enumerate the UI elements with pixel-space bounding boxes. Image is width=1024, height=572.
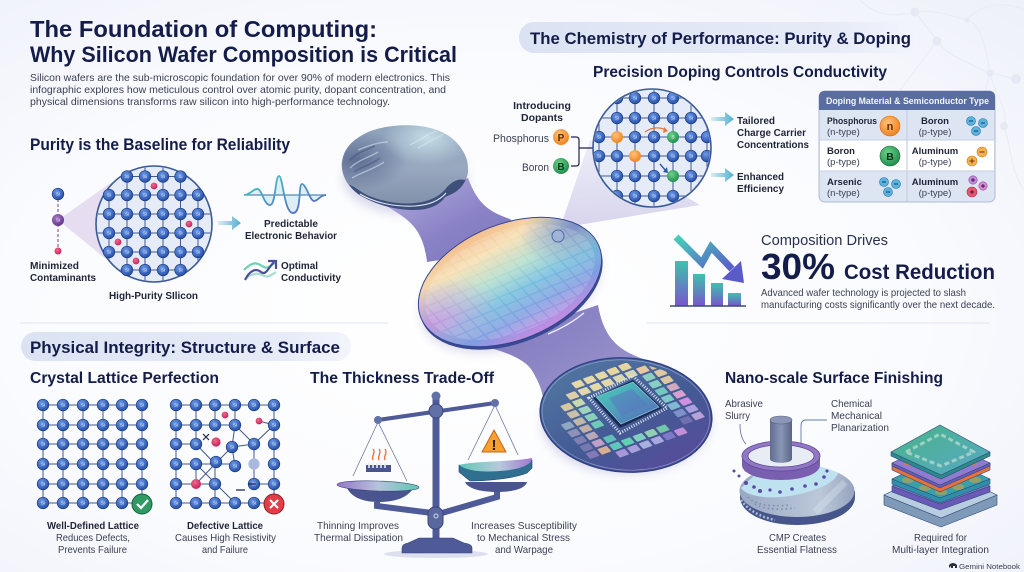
- lattice: well-defined: Si: [61, 462, 65, 467]
- lattice: high-purity silicon: Si: [125, 231, 129, 236]
- lattice: defective: Si: [213, 482, 217, 487]
- label: minimized contaminants: Minimized: [30, 260, 79, 272]
- row 1: (p-type): [919, 127, 951, 138]
- lattice: well-defined: [37, 399, 148, 509]
- label: enhanced efficiency: [737, 171, 784, 195]
- solder bumps: [904, 460, 977, 478]
- purple layer: [892, 463, 990, 510]
- lattice: defective: Si: [194, 501, 198, 506]
- lattice: defective: Si: [272, 442, 276, 447]
- right pan: thick wafer: [459, 458, 532, 492]
- scale beam and post: [377, 397, 497, 545]
- row 1: (n-type): [827, 127, 860, 138]
- heading pill: physical integrity: [21, 332, 351, 361]
- stat: composition drives 30% cost reduction: Advanced wafer technology is projected to slash: [761, 287, 966, 299]
- caption: well-defined lattice: Reduces Defects,: [56, 532, 130, 544]
- lattice: high-purity silicon: Si: [125, 212, 129, 217]
- lattice: high-purity silicon: Si: [178, 174, 183, 179]
- arrow: to behavior: [218, 216, 241, 230]
- labels: abrasive slurry: [725, 398, 763, 422]
- lattice: high-purity silicon: Si: [125, 250, 129, 255]
- lattice: high-purity silicon: Si: [107, 193, 111, 198]
- lattice: doped silicon: Si: [689, 174, 693, 179]
- row 1: n: [887, 121, 894, 133]
- lattice: defective: Si: [272, 482, 276, 487]
- lattice: high-purity silicon: Si: [196, 250, 200, 255]
- lattice: well-defined: Si: [120, 403, 124, 408]
- lattice: defective: Si: [174, 442, 178, 447]
- lattice: defective: [170, 399, 280, 509]
- intro text: Silicon wafers are the sub-microscopic foundation for over 90% of modern electronics. This: [30, 72, 450, 84]
- label: enhanced efficiency: Efficiency: [737, 183, 784, 195]
- contaminant chain: Si: [56, 218, 60, 223]
- lattice: high-purity silicon: Si: [161, 268, 165, 273]
- icon: cross: [264, 494, 284, 514]
- row 3: Arsenic: [827, 177, 862, 188]
- caption: defective lattice: and Failure: [202, 544, 248, 556]
- left pan strings: [353, 422, 407, 481]
- row 3: Aluminum: [912, 177, 958, 188]
- arrow: cost trending down: [676, 237, 744, 283]
- lattice: well-defined: Si: [81, 442, 85, 447]
- label: optimal conductivity: [281, 260, 341, 284]
- caption: thinning: [314, 520, 403, 544]
- illustration: multi-layer stack: [884, 425, 997, 527]
- lattice: defective: Si: [174, 501, 178, 506]
- lattice: well-defined: Si: [61, 501, 65, 506]
- central wafer progression: [342, 125, 716, 478]
- lattice: doped silicon: [590, 85, 715, 210]
- icon: waveform: [244, 176, 326, 213]
- lattice: defective: Si: [174, 403, 178, 408]
- lattice: defective: Si: [213, 423, 217, 428]
- label: predictable electronic behavior: Electronic Behavior: [245, 230, 337, 242]
- dopant: phosphorus: Phosphorus: [493, 133, 549, 145]
- section: chemistry of performance: [493, 22, 995, 311]
- lattice: well-defined: Si: [101, 462, 105, 467]
- lattice: well-defined: Si: [81, 403, 85, 408]
- lattice: well-defined: Si: [81, 482, 85, 487]
- heading: precision doping: Precision Doping Controls Conductivity: [593, 64, 887, 81]
- wafer: raw silicon: [342, 125, 468, 210]
- lattice: doped silicon: Si: [689, 135, 693, 140]
- illustration: cmp polisher: [732, 416, 855, 525]
- lattice: doped silicon: Si: [615, 154, 619, 159]
- lattice: well-defined: Si: [120, 501, 124, 506]
- label: high-purity silicon: High-Purity SIlicon: [109, 290, 198, 302]
- lattice: doped silicon: Si: [671, 154, 675, 159]
- lattice: high-purity silicon: Si: [161, 174, 165, 179]
- lattice: well-defined: Si: [140, 403, 144, 408]
- lattice: doped silicon: Si: [652, 116, 656, 121]
- label: optimal conductivity: Conductivity: [281, 272, 341, 284]
- caption: thinning: Thermal Dissipation: [314, 532, 403, 544]
- lattice: defective: Si: [174, 423, 178, 428]
- lattice: high-purity silicon: Si: [143, 212, 147, 217]
- lattice: high-purity silicon: Si: [143, 268, 147, 273]
- lattice: defective: Si: [230, 445, 234, 450]
- label: enhanced efficiency: Enhanced: [737, 171, 784, 183]
- stat: composition drives 30% cost reduction: Cost Reduction: [844, 260, 995, 284]
- lattice: well-defined: Si: [81, 462, 85, 467]
- caption: well-defined lattice: [47, 520, 139, 556]
- lattice: well-defined: Si: [81, 423, 85, 428]
- lattice: high-purity silicon: Si: [161, 212, 165, 217]
- heading: surface finishing: Nano-scale Surface Finishing: [725, 370, 943, 387]
- lattice: doped silicon: Si: [633, 135, 637, 140]
- lattice: defective: Si: [252, 482, 256, 487]
- row 2: B: [886, 151, 894, 163]
- caption: susceptibility: and Warpage: [495, 544, 553, 556]
- base layer: [884, 468, 997, 527]
- lattice: well-defined: Si: [140, 442, 144, 447]
- caption: cmp: CMP Creates: [769, 532, 826, 544]
- lattice: well-defined: Si: [41, 501, 45, 506]
- lattice: high-purity silicon: Si: [143, 250, 147, 255]
- lattice: doped silicon: Si: [615, 116, 619, 121]
- slurry particles: [732, 468, 829, 494]
- lattice: doped silicon: Si: [652, 135, 656, 140]
- lattice: well-defined: Si: [101, 482, 105, 487]
- intro text: physical dimensions transforms raw silicon into high-performance technology.: [30, 96, 390, 108]
- lattice: well-defined: Si: [101, 403, 105, 408]
- lattice: defective: Si: [194, 403, 198, 408]
- heading: crystal lattice: Crystal Lattice Perfection: [30, 370, 219, 387]
- upper purple layer with orange edge: [892, 440, 990, 492]
- lattice: defective: Si: [194, 462, 198, 467]
- lattice: well-defined: Si: [61, 442, 65, 447]
- lattice: doped silicon: Si: [633, 194, 637, 199]
- label: tailored charge carrier concentrations: [737, 115, 809, 151]
- caption: multi-layer: Required for: [914, 532, 967, 544]
- lattice: high-purity silicon: Si: [107, 212, 111, 217]
- lattice: high-purity silicon: Si: [161, 193, 165, 198]
- die grid: [560, 363, 704, 459]
- lattice: well-defined: Si: [41, 403, 45, 408]
- lattice: well-defined: Si: [61, 403, 65, 408]
- caption: susceptibility: Increases Susceptibility: [471, 520, 578, 532]
- lattice: high-purity silicon: Si: [107, 231, 111, 236]
- left pan: thin wafer: [337, 480, 419, 502]
- lattice: doped silicon: Si: [633, 116, 637, 121]
- lattice: high-purity silicon: Si: [178, 268, 183, 273]
- lattice: defective: Si: [174, 462, 178, 467]
- top die: [891, 425, 990, 479]
- lattice: high-purity silicon: Si: [178, 250, 183, 255]
- row 3: (p-type): [919, 188, 951, 199]
- lattice: high-purity silicon: Si: [178, 212, 183, 217]
- lattice: defective: Si: [194, 442, 198, 447]
- right pan strings: [468, 405, 518, 460]
- lattice: high-purity silicon: Si: [161, 250, 165, 255]
- dopant: boron: [522, 158, 569, 174]
- labels: cmp: Planarization: [831, 422, 889, 434]
- contaminant chain: Si: [56, 192, 60, 197]
- labels: abrasive slurry: Abrasive: [725, 398, 763, 410]
- lattice: well-defined: Si: [140, 423, 144, 428]
- row 2: (p-type): [827, 157, 860, 168]
- caption: cmp: [757, 532, 837, 556]
- label: predictable electronic behavior: Predictable: [264, 218, 318, 230]
- dopant: phosphorus: P: [558, 133, 565, 144]
- stat: composition drives 30% cost reduction: 30%: [761, 246, 835, 287]
- intro text: [30, 72, 450, 108]
- lattice: high-purity silicon: Si: [125, 193, 129, 198]
- lattice: doped silicon: Si: [671, 96, 675, 101]
- lattice: high-purity silicon: Si: [143, 174, 147, 179]
- lattice: defective: Si: [233, 423, 237, 428]
- labels: cmp: [831, 398, 889, 434]
- lattice: high-purity silicon: Si: [196, 212, 200, 217]
- lattice: defective: Si: [252, 442, 256, 447]
- lattice: doped silicon: Si: [652, 194, 656, 199]
- lattice: defective: Si: [233, 501, 237, 506]
- lattice: doped silicon: Si: [671, 116, 675, 121]
- title: The Foundation of Computing:: [30, 16, 377, 42]
- lattice: high-purity silicon: Si: [196, 193, 200, 198]
- lattice: high-purity silicon: Si: [143, 231, 147, 236]
- caption: susceptibility: to Mechanical Stress: [477, 532, 570, 544]
- table header: Doping Material & Semiconductor Type: [826, 96, 989, 107]
- zoom cone: [58, 182, 112, 264]
- label: introducing dopants: [513, 100, 571, 124]
- lattice: defective: Si: [213, 403, 217, 408]
- cone: wafer spot to doping lattice: [560, 140, 700, 228]
- lattice: defective: Si: [252, 501, 256, 506]
- dopant: boron: Boron: [522, 162, 549, 174]
- central processor chip: [589, 376, 667, 433]
- title: [30, 16, 457, 67]
- lattice: well-defined: Si: [140, 462, 144, 467]
- title: Why Silicon Wafer Composition is Critical: [30, 42, 457, 67]
- section: physical integrity: [21, 332, 997, 558]
- contaminant chain: [52, 188, 64, 254]
- lattice: well-defined: Si: [101, 501, 105, 506]
- teal layer: [892, 456, 990, 503]
- decorative network motif: [860, 0, 1024, 190]
- row 2: [827, 146, 987, 168]
- lattice: defective: Si: [252, 403, 256, 408]
- lattice: defective: Si: [272, 423, 276, 428]
- lattice: high-purity silicon: [95, 165, 213, 283]
- lattice: well-defined: Si: [81, 501, 85, 506]
- lattice: well-defined: Si: [101, 423, 105, 428]
- lattice: well-defined: Si: [41, 442, 45, 447]
- lattice: well-defined: Si: [61, 423, 65, 428]
- watermark: Gemini Notebook: [959, 562, 1020, 571]
- lattice: doped silicon: Si: [652, 174, 656, 179]
- heading: purity: Purity is the Baseline for Reliability: [30, 136, 291, 154]
- caption: defective lattice: Defective Lattice: [187, 520, 263, 532]
- label: introducing dopants: Introducing: [513, 100, 571, 112]
- caption: well-defined lattice: Prevents Failure: [58, 544, 127, 556]
- lattice: doped silicon: B: [671, 135, 675, 140]
- lattice: high-purity silicon: Si: [178, 193, 183, 198]
- label: minimized contaminants: Contaminants: [30, 272, 96, 284]
- lattice: defective: Si: [233, 464, 237, 469]
- lattice: high-purity silicon: Si: [196, 231, 200, 236]
- lattice: defective: Si: [272, 462, 276, 467]
- row 3: [827, 176, 987, 199]
- wafer: patterned rainbow: [418, 216, 603, 350]
- caption: multi-layer: Multi-layer Integration: [892, 544, 989, 556]
- lattice: high-purity silicon: Si: [178, 231, 183, 236]
- heading pill: physical integrity: Physical Integrity: Structure & Surface: [30, 339, 340, 357]
- icon: conductivity trend: [244, 261, 276, 280]
- lattice: defective: Si: [174, 482, 178, 487]
- lattice: doped silicon: Si: [633, 96, 637, 101]
- row 2: Aluminum: [912, 146, 958, 157]
- lattice: well-defined: Si: [140, 482, 144, 487]
- caption: multi-layer: [892, 532, 989, 556]
- row 3: (n-type): [827, 188, 860, 199]
- ribbon: patterned wafer to chip wafer: [480, 305, 648, 412]
- caption: cmp: Essential Flatness: [757, 544, 837, 556]
- scale base: [402, 538, 472, 553]
- label: minimized contaminants: [30, 260, 96, 284]
- caption: thinning: Thinning Improves: [317, 520, 399, 532]
- intro text: infographic explores how meticulous control over atomic purity, dopant concentration, and: [30, 84, 446, 96]
- row 2: Boron: [827, 146, 855, 157]
- bracket arrow into lattice: [571, 137, 613, 166]
- lattice: well-defined: Si: [41, 482, 45, 487]
- label: predictable electronic behavior: [245, 218, 337, 242]
- stat: composition drives 30% cost reduction: [761, 232, 995, 311]
- stat: composition drives 30% cost reduction: Composition Drives: [761, 232, 888, 249]
- lattice: well-defined: Si: [41, 423, 45, 428]
- label: tailored charge carrier concentrations: Charge Carrier: [737, 127, 806, 139]
- lattice: high-purity silicon: Si: [125, 174, 129, 179]
- label: tailored charge carrier concentrations: Concentrations: [737, 139, 809, 151]
- lattice: well-defined: Si: [120, 462, 124, 467]
- label: tailored charge carrier concentrations: Tailored: [737, 115, 775, 127]
- icon: heat dissipating chip: [366, 449, 391, 472]
- heading: thickness trade-off: The Thickness Trade-Off: [310, 370, 495, 387]
- lattice: defective: Si: [272, 403, 276, 408]
- caption: well-defined lattice: Well-Defined Lattice: [47, 520, 139, 532]
- lattice: doped silicon: Si: [652, 154, 656, 159]
- dopant: boron: B: [557, 162, 565, 173]
- spindle: [770, 416, 792, 463]
- lattice: well-defined: Si: [120, 442, 124, 447]
- dopant: phosphorus: [493, 129, 569, 145]
- ribbon: raw wafer to patterned wafer: [385, 178, 540, 262]
- row 2: (p-type): [919, 157, 951, 168]
- lattice: defective: Si: [214, 460, 218, 465]
- row 1: Boron: [921, 116, 949, 127]
- lattice: well-defined: Si: [61, 482, 65, 487]
- label: introducing dopants: Dopants: [521, 112, 563, 124]
- lattice: doped silicon: Si: [633, 174, 637, 179]
- icon: check: [132, 494, 152, 514]
- lattice: well-defined: Si: [41, 462, 45, 467]
- caption: defective lattice: Causes High Resistivity: [175, 532, 277, 544]
- labels: abrasive slurry: Slurry: [725, 410, 751, 422]
- labels: cmp: Chemical: [831, 398, 872, 410]
- heading pill: chemistry: The Chemistry of Performance: Purity & Doping: [530, 29, 911, 48]
- lattice: high-purity silicon: Si: [143, 193, 147, 198]
- polishing ring: [742, 441, 820, 480]
- green connectors: [902, 477, 981, 495]
- arrow: efficiency: [711, 168, 734, 182]
- row 1: [827, 116, 988, 138]
- lattice: high-purity silicon: Si: [107, 250, 111, 255]
- lattice: well-defined: Si: [120, 482, 124, 487]
- section: purity: [30, 136, 341, 302]
- chart: falling cost bars: [670, 237, 746, 306]
- lattice: well-defined: Si: [101, 442, 105, 447]
- caption: defective lattice: [175, 520, 277, 556]
- heading pill: chemistry: [519, 22, 917, 53]
- lattice: high-purity silicon: Si: [125, 268, 129, 273]
- lattice: doped silicon: Si: [615, 174, 619, 179]
- lattice: doped silicon: Si: [671, 194, 675, 199]
- icon: warning triangle: !: [492, 437, 496, 454]
- wafer: finished chip wafer: [539, 357, 713, 473]
- platen: [740, 465, 855, 525]
- row 1: Phosphorus: [827, 116, 877, 127]
- lattice: doped silicon: Si: [689, 116, 693, 121]
- lattice: doped silicon: Si: [652, 96, 656, 101]
- lattice: doped silicon: Si: [597, 135, 601, 140]
- illustration: balance scale: [337, 392, 532, 558]
- lattice: high-purity silicon: Si: [161, 231, 165, 236]
- labels: cmp: Mechanical: [831, 410, 882, 422]
- lattice: defective: Si: [213, 501, 217, 506]
- label: optimal conductivity: Optimal: [281, 260, 318, 272]
- table: doping material and semiconductor type: [819, 91, 995, 202]
- arrow: tailored carriers: [711, 112, 734, 126]
- shadow under wafers: [343, 142, 710, 474]
- lattice: defective: Si: [194, 423, 198, 428]
- lattice: defective: Si: [233, 403, 237, 408]
- lattice: doped silicon: Si: [689, 154, 693, 159]
- caption: susceptibility: [471, 520, 578, 556]
- lattice: doped silicon: Si: [597, 154, 601, 159]
- lattice: well-defined: Si: [120, 423, 124, 428]
- stat: composition drives 30% cost reduction: manufacturing costs significantly over the next decade.: [761, 299, 995, 311]
- icon: warning triangle: [482, 430, 506, 454]
